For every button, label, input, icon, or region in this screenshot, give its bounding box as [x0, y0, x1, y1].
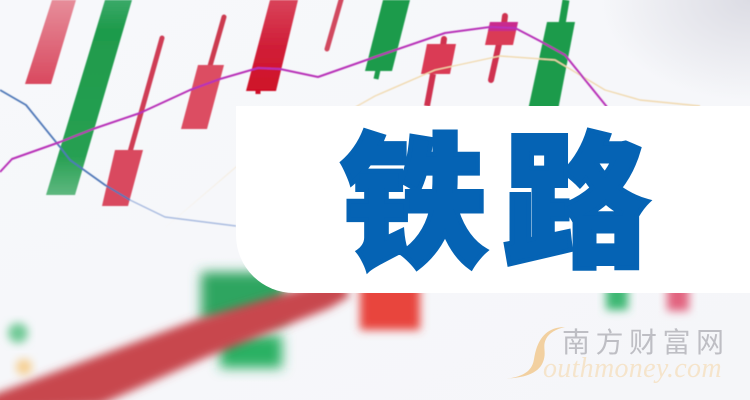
- blurred red bar: [0, 277, 350, 400]
- blurred green block lower: [220, 335, 282, 368]
- blurred red block: [360, 280, 420, 330]
- logo domain: outhmoney.com: [543, 353, 722, 384]
- line: blue moving average: [0, 90, 236, 226]
- watermark logo: [507, 327, 730, 384]
- blurred green block right: [606, 283, 628, 310]
- blurred pink block right: [667, 283, 689, 311]
- candle: dark red: [246, 0, 298, 94]
- candle: green right: [528, 0, 575, 110]
- icon: swoosh S: [507, 327, 565, 378]
- line: blue moving average faded: [130, 200, 236, 226]
- line: orange moving average: [160, 56, 700, 232]
- candle: red pale: [25, 0, 76, 84]
- candle: red mid: [181, 17, 224, 129]
- candle: red with long wick: [102, 38, 162, 206]
- title text: 铁路: [341, 123, 665, 286]
- blurred foreground candles: [0, 272, 689, 400]
- blurred green block upper: [201, 272, 285, 322]
- candle: red wick only: [327, 0, 341, 49]
- candle: green top: [365, 0, 410, 79]
- logo Chinese name: 南方财富网: [562, 327, 730, 358]
- candle: small red right: [485, 16, 518, 80]
- candlestick chart: [0, 0, 700, 232]
- blurred green dot: [8, 323, 28, 343]
- candle: small red left: [421, 39, 456, 106]
- candle: big green: [46, 0, 132, 195]
- line: purple moving average: [0, 27, 607, 172]
- blurred orange dot: [16, 359, 32, 375]
